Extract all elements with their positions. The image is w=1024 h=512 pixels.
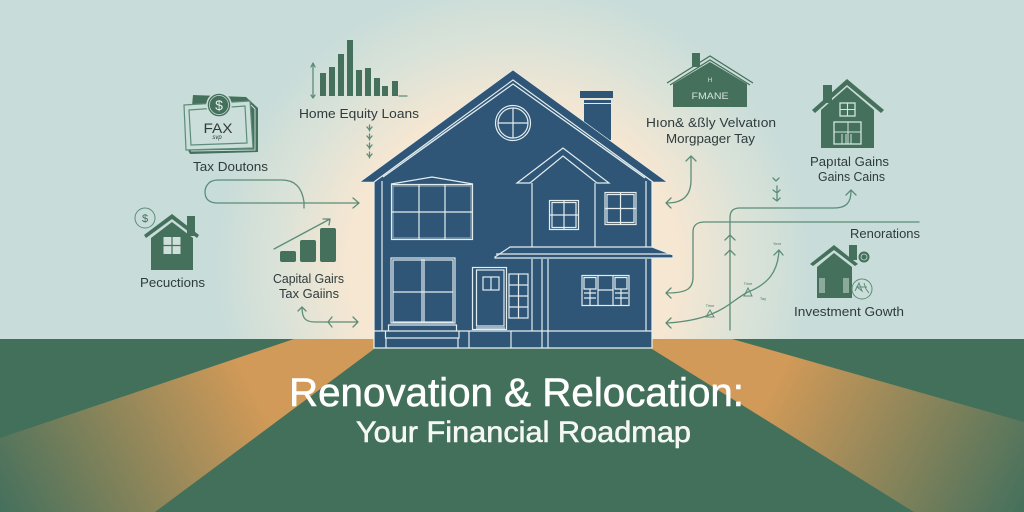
label: tax deductions: Tax Doutons <box>193 160 268 174</box>
right upper window <box>605 192 636 224</box>
icon: house with dollar coin: $ <box>142 213 148 225</box>
arrow: gains to house <box>298 307 358 327</box>
label: mortgage tax: Morgpager Tay <box>666 132 756 146</box>
label: renovations: Renorations <box>850 227 920 241</box>
foundation lines <box>469 331 511 348</box>
vertical chevrons <box>725 235 735 255</box>
dormer window <box>550 200 578 230</box>
left light path <box>0 339 374 512</box>
label: home equity loans: Home Equity Loans <box>299 107 419 121</box>
icon: growth bars <box>274 219 336 262</box>
porch roof <box>495 247 673 258</box>
label: tax gains: Tax Gaiins <box>279 287 339 301</box>
icon: tax bill stack: $ <box>215 97 223 113</box>
door side window <box>509 274 528 318</box>
green ground <box>0 339 1024 512</box>
tiny markers <box>706 241 782 317</box>
tiny markers: Time <box>706 303 715 308</box>
arrow: long gains route <box>730 190 856 330</box>
tiny markers: Year <box>773 241 782 246</box>
corner trim <box>382 181 646 331</box>
tiny markers: Tay <box>760 296 766 301</box>
title: Renovation & Relocation: <box>289 371 744 415</box>
round attic window <box>496 106 530 140</box>
arrow: renovations route <box>666 222 919 298</box>
tiny markers: Time <box>744 281 753 286</box>
dormer <box>517 148 609 247</box>
chimney <box>580 91 613 140</box>
front steps <box>386 325 459 348</box>
small arrows <box>773 178 780 201</box>
icon: finance house <box>667 53 753 107</box>
label: investment growth: Investment Gowth <box>794 305 904 319</box>
label: capital gains: Papıtal Gains <box>810 155 889 169</box>
right light path <box>652 339 1024 512</box>
arrow: investment curve <box>666 250 783 328</box>
label: capital gains tax gains: Capital Gairs <box>273 272 344 286</box>
roof <box>360 70 667 182</box>
porch posts and trim <box>374 259 652 348</box>
icon: finance house: H <box>708 78 712 84</box>
arrow: mortgage to house <box>666 156 696 208</box>
label: home and equity relocation: Hıon& &ßly Velvatıon <box>646 116 776 130</box>
icon: house with dollar coin <box>135 208 199 270</box>
arrow: tax to house <box>205 180 359 208</box>
small down arrows <box>367 125 372 158</box>
lower left window <box>391 258 455 323</box>
house illustration <box>360 70 673 348</box>
icon: finance house: FMANE <box>692 91 728 101</box>
icon: bar chart <box>311 40 407 98</box>
label: gains: Gains Cains <box>818 170 885 184</box>
label: deductions: Pecuctions <box>140 276 205 290</box>
icon: tax bill stack: FAX <box>204 120 233 136</box>
lower right window <box>582 276 629 306</box>
house body <box>374 178 652 348</box>
upper left window <box>391 177 473 240</box>
icon: tax bill stack <box>184 93 258 154</box>
icon: tax bill stack: svp <box>212 135 222 141</box>
subtitle: Your Financial Roadmap <box>356 416 691 449</box>
icon: large house <box>812 79 884 148</box>
sky background <box>0 0 1024 339</box>
front door <box>472 268 506 330</box>
icon: investment house <box>810 245 872 299</box>
